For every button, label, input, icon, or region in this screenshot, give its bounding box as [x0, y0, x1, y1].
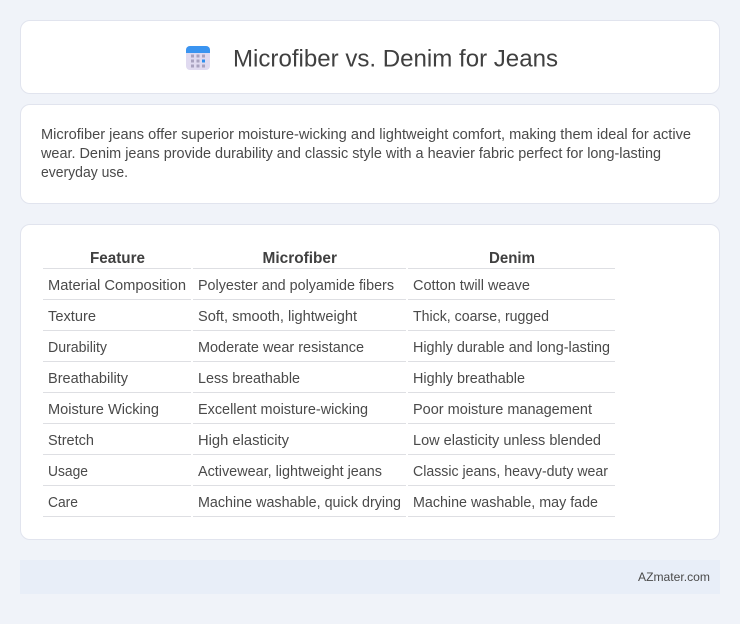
row: breathability	[48, 371, 525, 387]
row: durability	[48, 340, 610, 356]
panel: table card	[20, 224, 720, 540]
row: moisture wicking	[48, 402, 592, 418]
table rules	[43, 268, 615, 517]
row: texture: Soft, smooth, lightweight	[198, 309, 357, 325]
intro text	[40, 127, 691, 181]
intro text: everyday use.	[41, 165, 128, 181]
row: durability: Durability	[48, 340, 108, 356]
intro text: Microfiber jeans offer superior moisture-wicking and lightweight comfort, making them ideal for active	[41, 127, 691, 143]
row: care	[48, 495, 598, 511]
row: usage: Activewear, lightweight jeans	[198, 464, 382, 480]
footer text: AZmater.com	[638, 570, 710, 584]
row: moisture wicking: Moisture Wicking	[48, 402, 159, 418]
row: material composition	[48, 278, 530, 294]
row: durability: Moderate wear resistance	[198, 340, 364, 356]
row: material composition: Cotton twill weave	[413, 278, 530, 294]
row: usage	[48, 464, 608, 480]
row: usage: Classic jeans, heavy-duty wear	[413, 464, 608, 480]
table header: Denim	[489, 250, 535, 267]
row: care: Machine washable, may fade	[413, 495, 598, 511]
panel: intro card	[20, 104, 720, 204]
row: usage: Usage	[48, 464, 88, 480]
row: texture: Texture	[48, 309, 96, 325]
table header: Feature	[90, 250, 145, 267]
title: Microfiber vs. Denim for Jeans	[233, 46, 558, 72]
row: stretch	[48, 433, 601, 449]
row: material composition: Polyester and polyamide fibers	[198, 278, 394, 294]
row: material composition: Material Composition	[48, 278, 186, 294]
intro text: wear. Denim jeans provide durability and classic style with a heavier fabric perfect for long-lasting	[40, 146, 661, 162]
row: moisture wicking: Poor moisture management	[413, 402, 592, 418]
comparison table	[43, 250, 615, 517]
row: breathability: Less breathable	[198, 371, 300, 387]
row: breathability: Breathability	[48, 371, 129, 387]
row: care: Care	[48, 495, 78, 511]
panel: footer bar	[20, 560, 720, 594]
table header	[90, 250, 535, 267]
row: stretch: High elasticity	[198, 433, 290, 449]
row: stretch: Low elasticity unless blended	[413, 433, 601, 449]
row: texture: Thick, coarse, rugged	[413, 309, 549, 325]
row: moisture wicking: Excellent moisture-wicking	[198, 402, 368, 418]
row: stretch: Stretch	[48, 433, 94, 449]
table header: Microfiber	[262, 250, 337, 267]
row: texture	[48, 309, 549, 325]
row: durability: Highly durable and long-lasting	[413, 340, 610, 356]
row: care: Machine washable, quick drying	[198, 495, 401, 511]
icon: calendar	[186, 46, 210, 70]
panel: title card	[20, 20, 720, 94]
row: breathability: Highly breathable	[413, 371, 525, 387]
